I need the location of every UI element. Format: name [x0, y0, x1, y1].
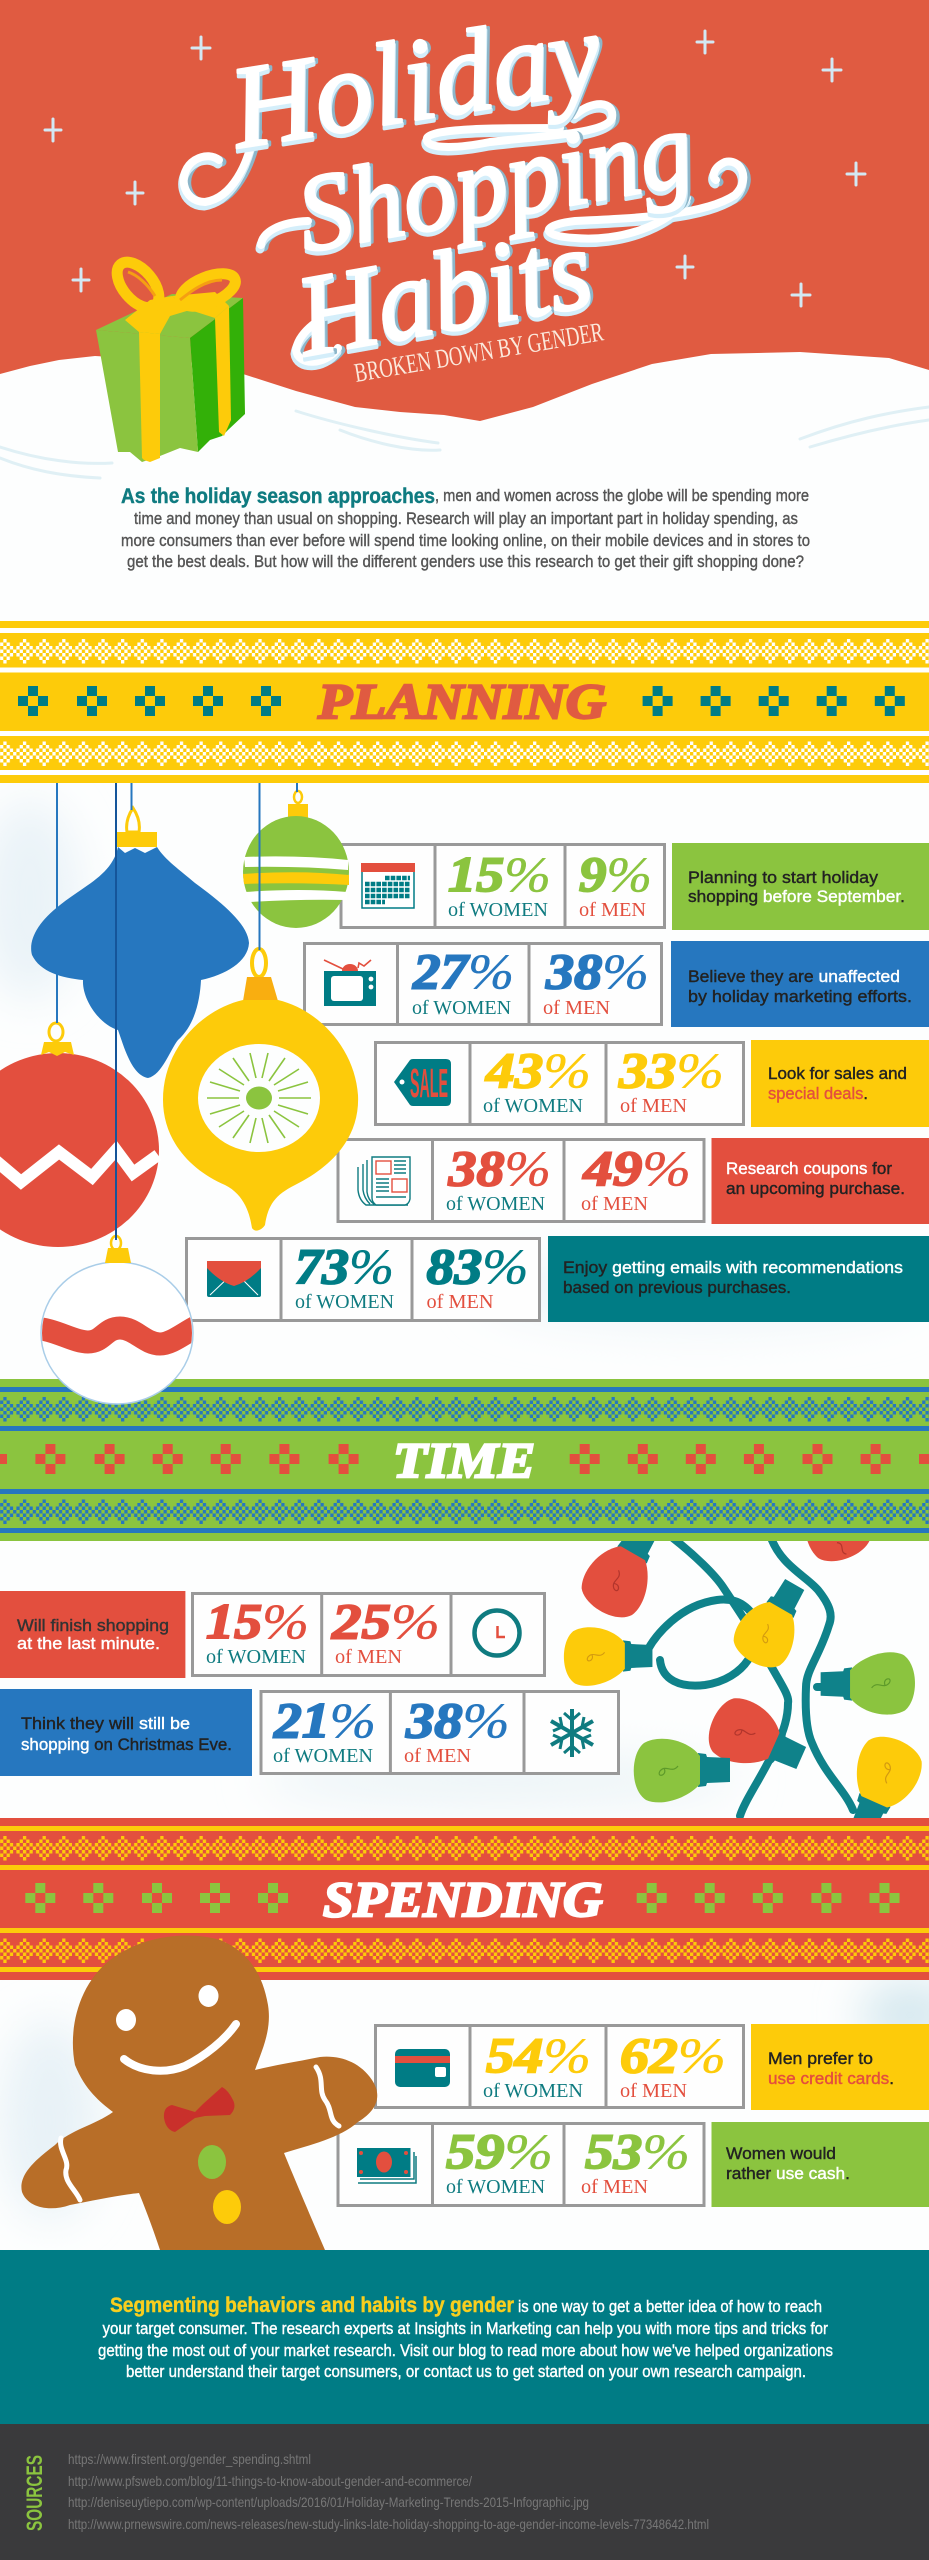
callout: Research coupons for: [726, 1160, 893, 1178]
cross motifs: [25, 1883, 900, 1913]
labels: of WOMEN: [446, 1193, 545, 1215]
conclusion text: getting the most out of your market research. Visit our blog to read more about how we've helped organizations: [98, 2342, 833, 2360]
eyes: [116, 1985, 218, 2031]
callout: Enjoy getting emails with recommendations: [563, 1259, 903, 1277]
stat row: last minute: [0, 1591, 544, 1678]
ornament: red: [0, 1023, 159, 1247]
button: yellow: [213, 2190, 241, 2224]
callout: rather use cash.: [726, 2165, 850, 2183]
smile and icing: [61, 2024, 339, 2200]
callout: Men prefer to: [768, 2050, 873, 2068]
38% of men: 38%: [545, 943, 649, 999]
conclusion text: better understand their target consumers, or contact us to get started on your own research campaign.: [126, 2363, 806, 2381]
snow drift: [0, 352, 929, 600]
stat row: sales and special deals: SALE: [410, 1060, 448, 1106]
stat row: christmas eve: [0, 1689, 618, 1776]
conclusion text: Segmenting behaviors and habits by gender: [110, 2294, 514, 2317]
ornament strings: [57, 783, 297, 1240]
callout: Women would: [726, 2145, 836, 2163]
stat row: start before September: [341, 843, 929, 930]
button: green: [198, 2145, 226, 2179]
bulb: red lower: [708, 1698, 806, 1769]
33% of men: 33%: [618, 1042, 724, 1098]
bulb: yellow lower: [854, 1736, 922, 1818]
icon: credit card: [395, 2049, 450, 2087]
heading: planning: PLANNING: [317, 673, 606, 729]
bulb: green right: [821, 1652, 915, 1715]
bow: [109, 255, 240, 315]
banner: time: [0, 1379, 929, 1541]
callout: Planning to start holiday: [688, 869, 879, 887]
stars: [45, 31, 865, 306]
callout: based on previous purchases.: [563, 1279, 791, 1297]
conclusion text: your target consumer. The research experts at Insights in Marketing can help you with more tips and tricks for: [102, 2320, 828, 2338]
labels: [446, 2176, 648, 2198]
59% of women: 59%: [446, 2123, 553, 2179]
ornament: white: [30, 1236, 200, 1404]
callout: [751, 2024, 929, 2110]
9% of men: 9%: [579, 846, 652, 902]
bulb: red top right: [808, 1541, 870, 1562]
labels: [412, 997, 610, 1019]
labels: [446, 1193, 648, 1215]
title: Holiday Shopping Habits: [183, 0, 746, 386]
stat table: [338, 1139, 704, 1222]
heading: time: TIME: [393, 1432, 535, 1488]
icon: clock: [474, 1610, 520, 1656]
callout: shopping before September .: [688, 888, 905, 906]
labels: of WOMEN: [446, 2176, 545, 2198]
stat table: [192, 1593, 544, 1676]
25% of men: 25%: [331, 1593, 440, 1649]
intro text: , men and women across the globe will be spending more: [435, 487, 809, 505]
icon: gift box: [96, 255, 245, 462]
labels: [483, 1095, 687, 1117]
panel: time stats: [0, 1591, 618, 1776]
title line: Shopping: Shopping: [288, 86, 701, 276]
cross motifs: [0, 1444, 929, 1474]
labels: [295, 1291, 494, 1313]
icon: envelope: [207, 1261, 261, 1297]
ornament: blue: [31, 808, 249, 1078]
labels: of MEN: [335, 1646, 402, 1668]
labels: of MEN: [543, 997, 610, 1019]
callout: at the last minute.: [17, 1635, 160, 1653]
callout: [712, 1138, 929, 1224]
callout: Will finish shopping: [17, 1617, 169, 1635]
icon: snowflake: [551, 1709, 593, 1757]
banner: spending: [0, 1818, 929, 1980]
cookie body: [21, 1936, 377, 2250]
icon: television: [324, 960, 376, 1006]
labels: of WOMEN: [448, 899, 548, 921]
callout: [0, 1591, 185, 1678]
callout: [751, 1040, 929, 1127]
callout: by holiday marketing efforts.: [688, 988, 912, 1006]
38% of men: 38%: [405, 1692, 510, 1748]
callout: Look for sales and: [768, 1065, 907, 1083]
ornament: green: [243, 791, 349, 928]
labels: of WOMEN: [412, 997, 511, 1019]
source links: http://www.pfsweb.com/blog/11-things-to-know-about-gender-and-ecommerce/: [68, 2473, 472, 2489]
title line: Shopping: Shopping: [291, 88, 704, 277]
illustration: ornaments: [0, 783, 358, 1404]
callout: [671, 941, 929, 1027]
labels: of MEN: [620, 1095, 687, 1117]
snow shading: [0, 407, 929, 478]
red sky: [0, 0, 929, 430]
ornament: yellow: [163, 949, 358, 1231]
subtitle: BROKEN DOWN BY GENDER: [352, 316, 605, 388]
callout: use credit cards .: [768, 2070, 894, 2088]
title line: Habits: Habits: [286, 208, 602, 386]
callout: an upcoming purchase.: [726, 1180, 905, 1198]
21% of women: 21%: [273, 1692, 376, 1748]
labels: of WOMEN: [483, 1095, 583, 1117]
bulb: green lower: [634, 1739, 730, 1802]
callout: shopping on Christmas Eve.: [21, 1736, 232, 1754]
labels: of WOMEN: [206, 1646, 306, 1668]
callout: special deals.: [768, 1085, 868, 1103]
62% of men: 62%: [620, 2027, 726, 2083]
stat table: [186, 1238, 540, 1321]
callout: [548, 1236, 929, 1322]
conclusion text: [98, 2294, 833, 2381]
stat table: [338, 2123, 704, 2206]
callout: [0, 1689, 252, 1776]
panel: conclusion: [0, 2250, 929, 2424]
intro text: time and money than usual on shopping. Research will play an important part in holiday spending, as: [134, 510, 798, 528]
labels: [273, 1745, 471, 1767]
53% of men: 53%: [585, 2123, 690, 2179]
source links: http://www.prnewswire.com/news-releases/new-study-links-late-holiday-shopping-to-age-gender-income-levels-77348642.html: [68, 2516, 709, 2532]
panel: planning stats: [186, 843, 929, 1322]
labels: of MEN: [620, 2080, 687, 2102]
labels: [448, 899, 646, 921]
43% of women: 43%: [485, 1042, 591, 1098]
labels: of MEN: [579, 899, 646, 921]
stat row: credit cards: [376, 2024, 929, 2110]
icon: newspaper: [358, 1157, 410, 1205]
labels: [206, 1646, 402, 1668]
source links: https://www.firstent.org/gender_spending.shtml: [68, 2451, 311, 2467]
banner: planning: [0, 621, 929, 783]
labels: of MEN: [581, 2176, 648, 2198]
stat table: [376, 1042, 744, 1125]
icon: cash: [357, 2148, 416, 2183]
stat row: cash: [338, 2122, 929, 2207]
38% of women: 38%: [447, 1140, 551, 1196]
icon: sale tag: [394, 1059, 451, 1106]
illustration: gingerbread man: [21, 1936, 377, 2250]
stat row: research coupons: [338, 1138, 929, 1224]
panel: spending stats: [338, 2024, 929, 2207]
sources heading: SOURCES: [22, 2455, 47, 2531]
stat table: [304, 943, 662, 1025]
bulb: yellow center: [734, 1579, 804, 1668]
source links: http://deniseuytiepo.com/wp-content/uploads/2016/01/Holiday-Marketing-Trends-2015-Infographic.jpg: [68, 2494, 589, 2510]
stat table: [376, 2025, 744, 2108]
title shadow: [183, 104, 746, 366]
stat row: sales and special deals: [376, 1040, 929, 1127]
title line: Habits: Habits: [289, 206, 604, 383]
27% of women: 27%: [412, 943, 514, 999]
15% of women: 15%: [448, 846, 551, 902]
title line: Habits: Habits: [285, 204, 601, 382]
title line: Shopping: Shopping: [289, 90, 702, 280]
stat table: [341, 844, 664, 928]
15% of women: 15%: [206, 1593, 309, 1649]
73% of women: 73%: [295, 1238, 394, 1294]
intro text: As the holiday season approaches: [121, 485, 435, 508]
stat row: unaffected by marketing: [304, 941, 929, 1027]
labels: of WOMEN: [483, 2080, 583, 2102]
panel: sources: [0, 2424, 929, 2560]
source links: [68, 2451, 709, 2532]
labels: of MEN: [581, 1193, 648, 1215]
labels: of MEN: [404, 1745, 471, 1767]
bow tie: [164, 2087, 234, 2132]
bulb: yellow left: [564, 1627, 652, 1686]
54% of women: 54%: [486, 2027, 591, 2083]
icon: calendar: [361, 863, 415, 908]
conclusion text: is one way to get a better idea of how to reach: [518, 2298, 822, 2316]
intro text: [121, 485, 810, 571]
intro text: more consumers than ever before will spend time looking online, on their mobile devices and in stores to: [121, 532, 810, 550]
callout: Think they will still be: [21, 1715, 190, 1733]
callout: [672, 843, 929, 930]
83% of men: 83%: [426, 1238, 528, 1294]
cross motifs: [18, 686, 905, 716]
callout: Believe they are unaffected: [688, 968, 900, 986]
labels: [483, 2080, 687, 2102]
heading: spending: SPENDING: [323, 1871, 602, 1927]
panel: header: [0, 0, 929, 600]
labels: of WOMEN: [295, 1291, 394, 1313]
bulb: red top left: [582, 1541, 654, 1618]
callout: [712, 2122, 929, 2207]
light cords: [646, 1535, 853, 1816]
illustration: christmas lights: [564, 1541, 922, 1818]
stat row: emails with recommendations: [186, 1236, 929, 1322]
stat table: [261, 1691, 618, 1774]
49% of men: 49%: [582, 1140, 691, 1196]
labels: of MEN: [426, 1291, 494, 1313]
labels: of WOMEN: [273, 1745, 373, 1767]
intro text: get the best deals. But how will the different genders use this research to get their gift shopping done?: [127, 553, 804, 571]
